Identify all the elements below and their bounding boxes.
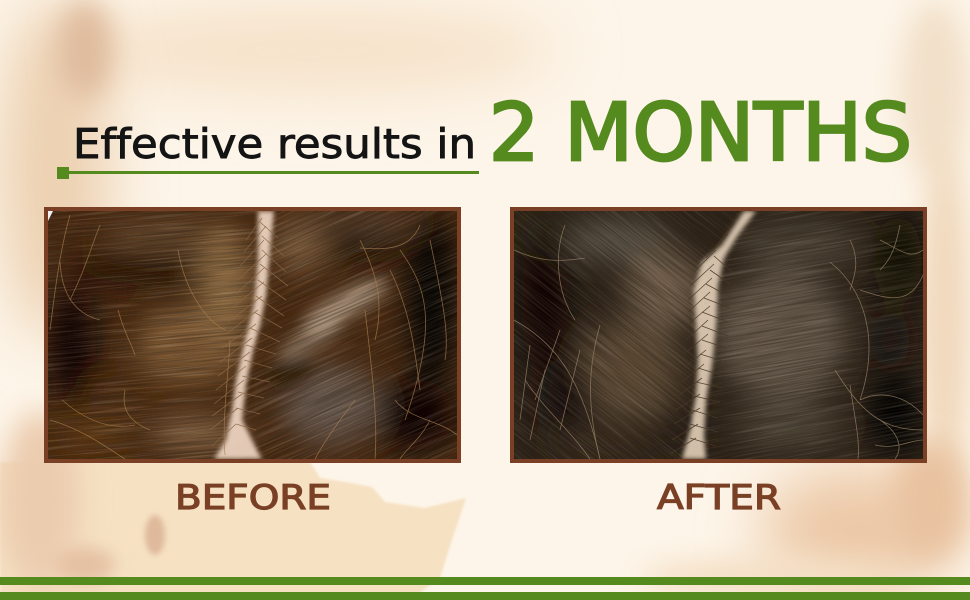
stray hairs <box>50 215 457 459</box>
panel: before photo <box>44 207 461 463</box>
footer stripes <box>0 577 970 600</box>
scalp parting <box>682 211 756 459</box>
heading: Effective results in: Effective results in <box>73 120 476 168</box>
heading: 2 MONTHS: 2 MONTHS <box>489 87 912 179</box>
panel: after photo <box>510 207 927 463</box>
heading underline with square marker <box>57 167 479 179</box>
stray hairs <box>514 225 923 459</box>
title <box>57 87 912 179</box>
hair streak texture <box>514 211 740 459</box>
hair streak texture <box>48 211 262 459</box>
label: BEFORE: BEFORE <box>175 478 331 518</box>
scalp parting <box>214 211 274 459</box>
label: AFTER: AFTER <box>657 478 781 518</box>
